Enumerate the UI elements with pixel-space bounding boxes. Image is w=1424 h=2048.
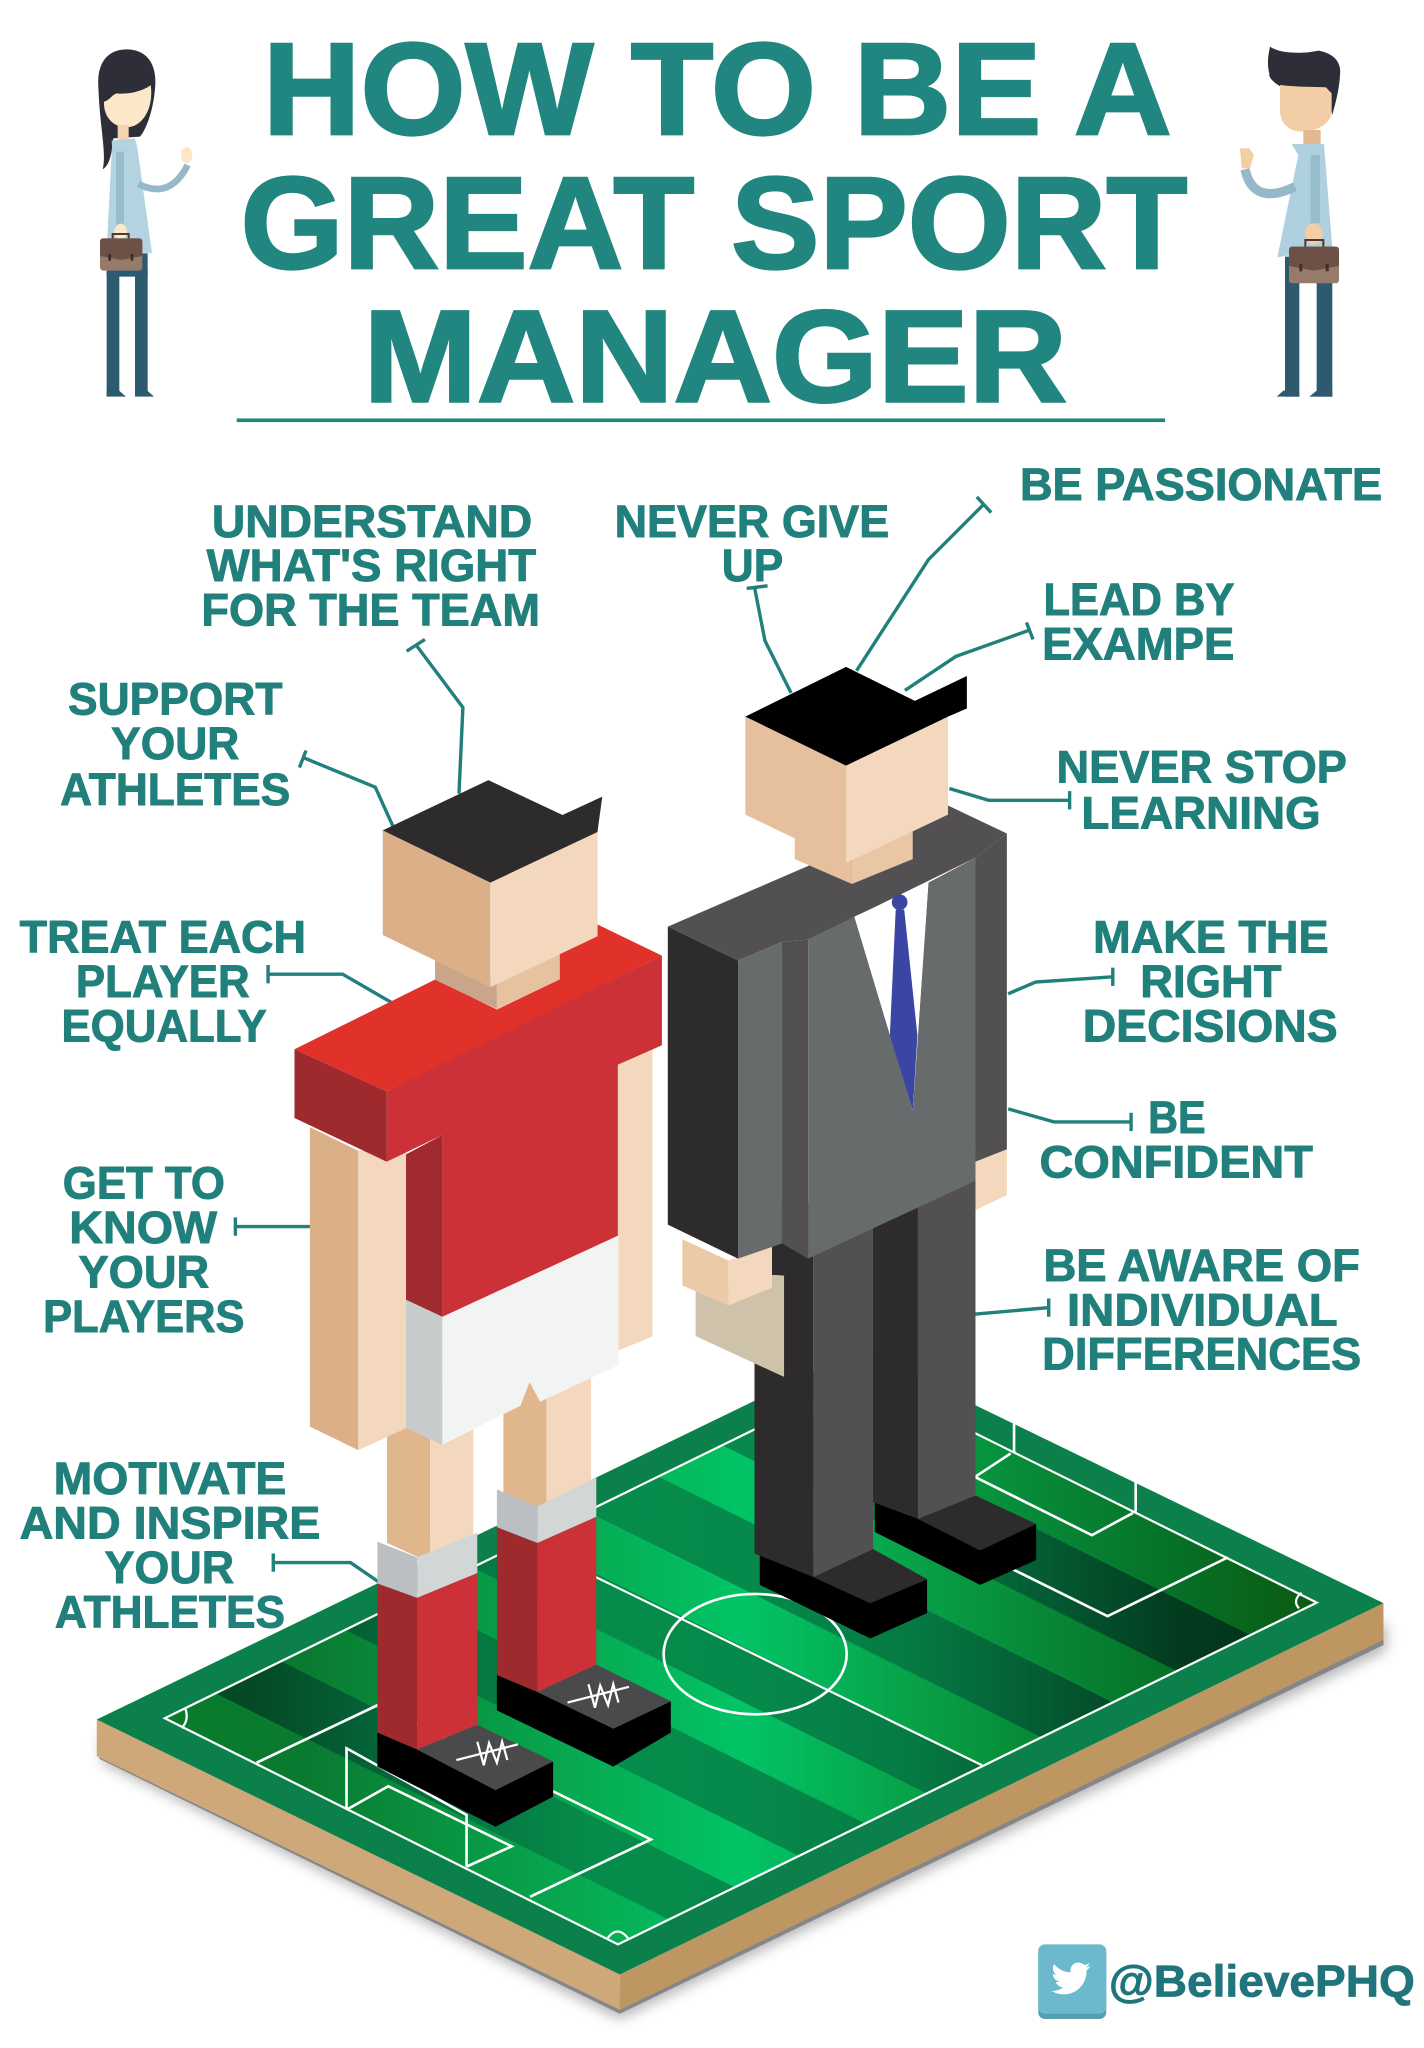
label: lead by example: LEAD BY (1043, 574, 1234, 625)
manager folder (696, 1275, 784, 1377)
label: treat each player equally: TREAT EACH (20, 912, 306, 963)
label: motivate and inspire your athletes: MOTIVATE (54, 1453, 286, 1504)
player shorts (406, 1236, 619, 1445)
label: treat each player equally (20, 912, 392, 1052)
player right leg (497, 1347, 671, 1767)
football pitch platform (97, 1349, 1386, 2019)
label: support your athletes: ATHLETES (60, 764, 290, 815)
label: understand what's right for the team: WHAT'S RIGHT (207, 540, 537, 591)
label: make the right decisions: DECISIONS (1083, 1001, 1338, 1052)
illustration: woman manager (98, 49, 192, 397)
title: GREAT SPORT (241, 150, 1187, 296)
title (241, 16, 1187, 429)
label: understand what's right for the team: UNDERSTAND (212, 496, 532, 547)
player neck (435, 948, 560, 1009)
manager jacket (668, 805, 1007, 1259)
title: HOW TO BE A (263, 16, 1172, 162)
player shirt (294, 915, 662, 1317)
label: understand what's right for the team: FOR THE TEAM (201, 585, 540, 636)
title: MANAGER (364, 283, 1067, 429)
label: never stop learning: LEARNING (1081, 787, 1321, 838)
pitch stripes (165, 1377, 1317, 1944)
illustration: isometric football player (294, 780, 671, 1827)
label: never stop learning (949, 742, 1347, 838)
label: be passionate: BE PASSIONATE (1020, 459, 1382, 510)
manager neck (795, 817, 913, 884)
title underline (237, 418, 1165, 422)
label: make the right decisions: RIGHT (1140, 956, 1282, 1007)
label: never give up (615, 496, 889, 693)
label: be aware of individual differences: BE AWARE OF (1043, 1240, 1360, 1291)
label: never give up: UP (722, 540, 783, 591)
label: get to know your players: YOUR (78, 1246, 209, 1297)
label: motivate and inspire your athletes: YOUR (105, 1542, 234, 1593)
label: support your athletes: SUPPORT (68, 674, 283, 725)
manager head (745, 667, 967, 863)
twitter icon (1038, 1944, 1106, 2019)
label: make the right decisions (1008, 912, 1338, 1052)
label: motivate and inspire your athletes (20, 1453, 379, 1637)
label: be confident: BE (1148, 1092, 1206, 1143)
label: lead by example: EXAMPE (1042, 619, 1234, 670)
manager tie (890, 894, 917, 1111)
label: understand what's right for the team (201, 496, 540, 794)
label: be aware of individual differences: DIFFERENCES (1042, 1329, 1361, 1380)
label: be confident (1008, 1092, 1313, 1188)
illustration: isometric manager in suit (668, 667, 1036, 1638)
player head (383, 780, 602, 987)
label: be aware of individual differences: INDIVIDUAL (1067, 1284, 1338, 1335)
label: never give up: NEVER GIVE (615, 496, 889, 547)
illustration: man manager (1240, 47, 1340, 397)
label: treat each player equally: PLAYER (76, 956, 250, 1007)
label: motivate and inspire your athletes: ATHLETES (55, 1586, 285, 1637)
label: get to know your players: GET TO (63, 1157, 225, 1208)
pitch lines (165, 1377, 1317, 1944)
manager trousers and shoes (754, 1151, 1036, 1638)
label: motivate and inspire your athletes: AND INSPIRE (20, 1497, 320, 1548)
label: get to know your players (43, 1157, 310, 1342)
label: get to know your players: KNOW (69, 1202, 217, 1253)
label: be aware of individual differences (974, 1240, 1361, 1380)
player arms (310, 1047, 653, 1450)
label: support your athletes: YOUR (111, 718, 239, 769)
label: treat each player equally: EQUALLY (61, 1001, 267, 1052)
label: support your athletes (60, 674, 394, 828)
manager hand (682, 1239, 772, 1306)
label: be confident: CONFIDENT (1040, 1137, 1313, 1188)
label: be passionate (856, 459, 1382, 671)
player left leg (377, 1386, 553, 1827)
label: never stop learning: NEVER STOP (1057, 742, 1347, 793)
label: make the right decisions: MAKE THE (1093, 912, 1329, 963)
twitter handle: @BelievePHQ (1109, 1958, 1415, 2007)
label: lead by example (905, 574, 1234, 690)
label: get to know your players: PLAYERS (43, 1291, 245, 1342)
